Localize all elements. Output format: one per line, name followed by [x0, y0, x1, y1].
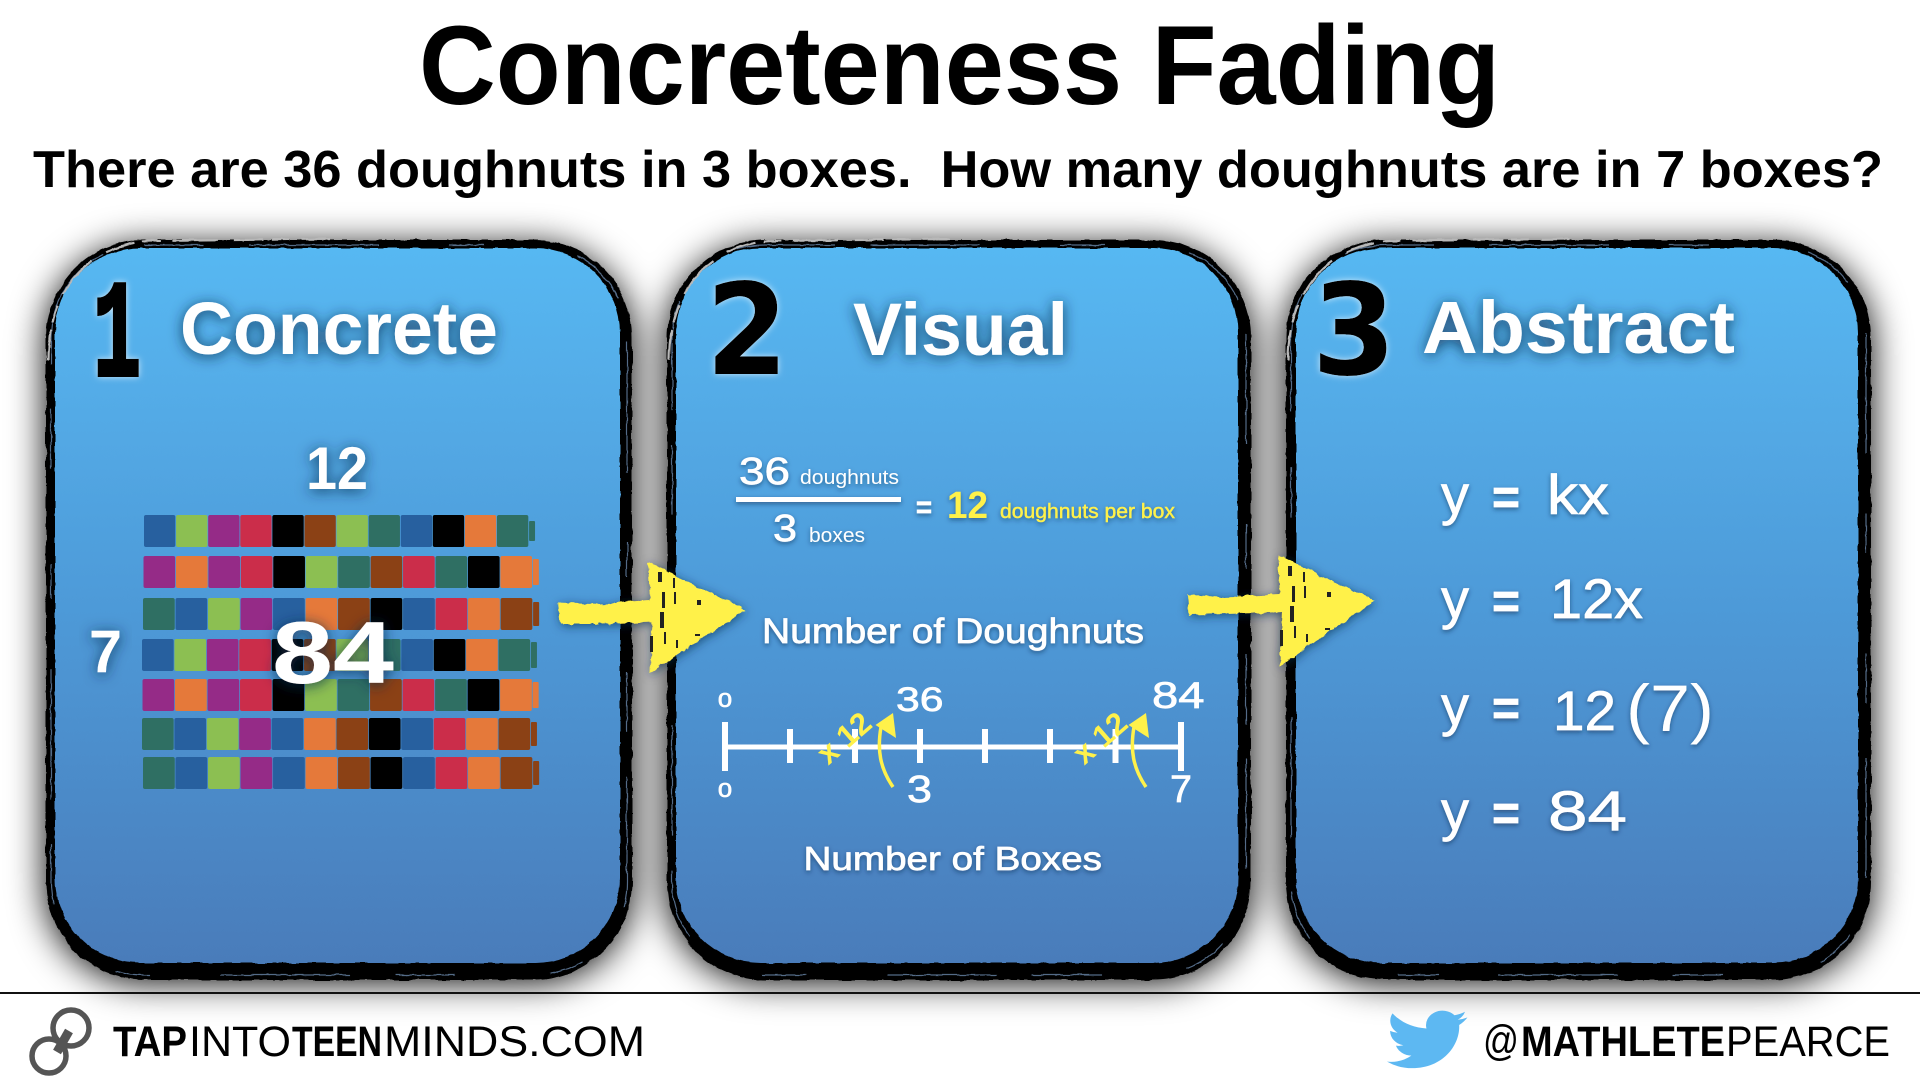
- footer divider: [0, 992, 1920, 994]
- step number 2: 2: [706, 256, 788, 404]
- double number line: 84: [1152, 675, 1204, 716]
- arrow: visual to abstract: [1187, 555, 1374, 666]
- unit rate fraction: 12: [947, 485, 988, 527]
- website wordmark: [113, 1018, 645, 1066]
- multiplier arrow: 3 boxes to 36: [810, 705, 896, 787]
- website wordmark: TAP: [113, 1018, 187, 1066]
- double number line: 3: [907, 769, 932, 811]
- equation: y = 12x: =: [1492, 573, 1520, 629]
- equation: y = kx: =: [1492, 469, 1520, 525]
- panel drop shadows: [46, 246, 1871, 982]
- unit rate fraction: boxes: [809, 525, 865, 547]
- product label: 84: 84: [272, 603, 394, 702]
- website wordmark: MINDS.COM: [384, 1018, 645, 1066]
- equation: y = 84: [1441, 779, 1627, 842]
- heading: concrete: Concrete: [180, 287, 498, 370]
- equation: y = 12(7): [1441, 671, 1714, 745]
- website wordmark: INTO: [189, 1018, 291, 1066]
- unit rate fraction: [736, 451, 1175, 550]
- equation: y = 84: y: [1441, 779, 1469, 842]
- axis title: doughnuts: Number of Doughnuts: [762, 612, 1144, 651]
- multiplier arrow: 7 boxes to 84: [1066, 705, 1149, 787]
- heading: abstract: Abstract: [1422, 286, 1735, 369]
- equation: y = 12(7): 12: [1553, 679, 1616, 742]
- multiplier arrow: 3 boxes to 36: x 12: [810, 705, 878, 771]
- panel: visual: [667, 239, 1251, 980]
- label: 12 across: 12: [306, 435, 368, 502]
- axis title: boxes: Number of Boxes: [804, 840, 1102, 877]
- panel frame: [46, 239, 632, 980]
- twitter handle: [1483, 1017, 1890, 1066]
- arrow: concrete to visual: [558, 562, 746, 672]
- equation: y = 12(7): =: [1492, 680, 1520, 736]
- equation: y = 84: 84: [1548, 779, 1627, 842]
- panel: abstract: [1286, 239, 1871, 980]
- title: Concreteness Fading: [419, 3, 1500, 128]
- unit rate fraction: 36: [739, 451, 790, 493]
- cube array: [142, 515, 539, 789]
- step number 1: 1: [93, 261, 141, 417]
- double number line: [718, 675, 1204, 811]
- equation: y = 12x: 12x: [1550, 567, 1643, 630]
- equation: y = kx: kx: [1547, 463, 1609, 526]
- unit rate fraction: 3: [773, 508, 797, 550]
- unit rate fraction: doughnuts: [800, 467, 899, 489]
- step number 3: 3: [1312, 256, 1396, 404]
- double number line: 0: [718, 780, 732, 802]
- label: 7 rows: 7: [89, 618, 122, 685]
- double number line: 0: [718, 690, 732, 712]
- icon: chain link logo: [32, 1010, 89, 1073]
- double number line: 36: [896, 681, 944, 719]
- equation: y = 12(7): y: [1441, 674, 1469, 737]
- equation: y = 12x: [1441, 567, 1643, 630]
- question subtitle: There are 36 doughnuts in 3 boxes. How many doughnuts are in 7 boxes?: [33, 141, 1883, 199]
- multiplier arrow: 7 boxes to 84: x 12: [1066, 705, 1134, 771]
- equation: y = 12(7): (7): [1626, 671, 1714, 745]
- unit rate fraction: =: [916, 491, 932, 524]
- equation: y = kx: [1441, 463, 1609, 526]
- equation: y = 84: =: [1492, 785, 1520, 841]
- equation: y = 12x: y: [1441, 567, 1469, 630]
- panel frame: [1286, 239, 1871, 980]
- twitter handle: @: [1483, 1017, 1519, 1065]
- website wordmark: TEEN: [292, 1018, 382, 1066]
- panel frame: [667, 239, 1251, 980]
- icon: twitter bird: [1387, 1011, 1467, 1068]
- heading: visual: Visual: [853, 288, 1068, 371]
- double number line: 7: [1170, 769, 1192, 811]
- twitter handle: MATHLETE: [1521, 1018, 1725, 1066]
- twitter handle: PEARCE: [1726, 1018, 1890, 1066]
- unit rate fraction: doughnuts per box: [1000, 501, 1175, 523]
- equation: y = kx: y: [1441, 463, 1469, 526]
- panel: concrete: [46, 239, 632, 980]
